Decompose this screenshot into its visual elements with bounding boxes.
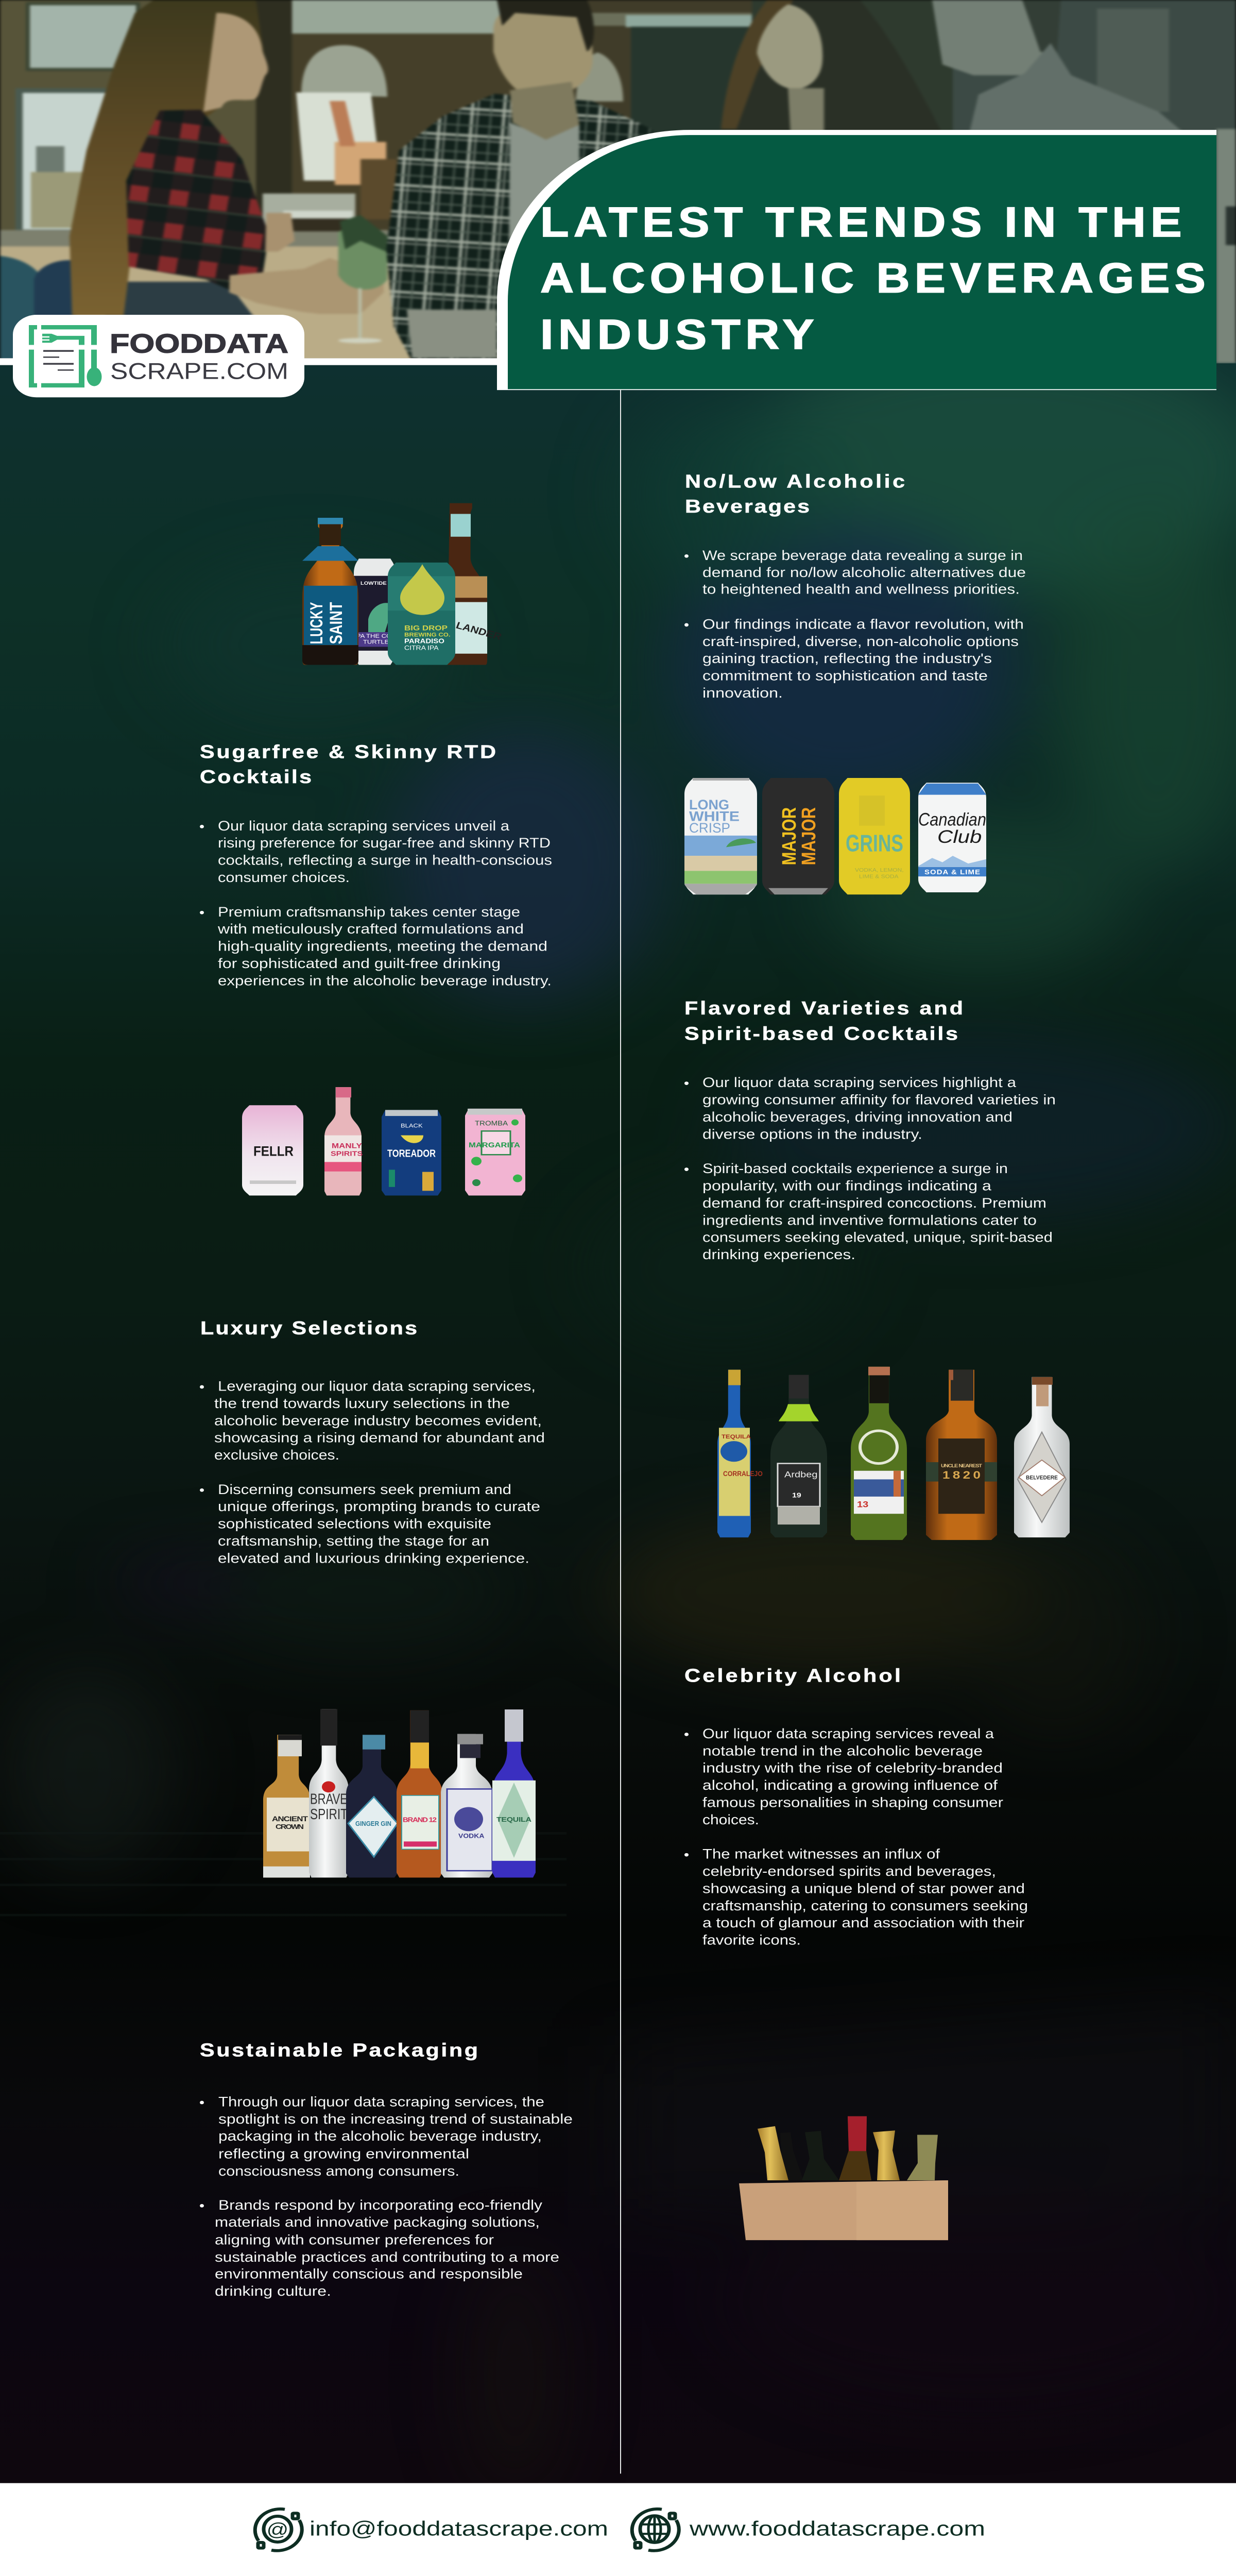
bullet list: a touch of glamour and association with their (702, 1916, 1024, 1931)
bullet list: craftsmanship, setting the stage for an (218, 1533, 489, 1549)
icon: email (255, 2509, 302, 2551)
bullet list: favorite icons. (702, 1933, 801, 1948)
bullet list: high-quality ingredients, meeting the demand (218, 939, 547, 954)
bottle: Belvedere: BELVEDERE (1026, 1474, 1058, 1481)
bullet list: notable trend in the alcoholic beverage (702, 1743, 983, 1759)
bottle: Ardbeg: Ardbeg (784, 1469, 817, 1479)
can: Major Major (762, 778, 834, 894)
can: Long White Crisp (684, 778, 757, 894)
can: Grins (839, 778, 910, 894)
man in grey shirt (932, 0, 1190, 138)
title: LATEST TRENDS IN THE (540, 199, 1187, 246)
bullet list: spotlight is on the increasing trend of sustainable (218, 2111, 573, 2127)
logo wordmark: SCRAPE.COM (110, 359, 288, 384)
heading (200, 742, 496, 787)
title panel (497, 130, 1216, 390)
panel: celebrity alcohol (684, 1666, 1028, 2240)
bottle: Brand 12: BRAND 12 (403, 1816, 437, 1823)
bottle: Vodka: VODKA (458, 1833, 484, 1839)
can: Grins: VODKA, LEMON, (855, 868, 904, 873)
can: Toreador: TOREADOR (387, 1147, 436, 1159)
can: Tromba margarita (465, 1109, 525, 1196)
can: Grins: LIME & SODA (859, 874, 899, 879)
panel: luxury selections (200, 1087, 545, 1566)
bullet list: choices. (702, 1812, 759, 1827)
bottle: Ardbeg (770, 1375, 827, 1537)
bottle: Brand 12 (397, 1710, 442, 1877)
icon: email: @ (267, 2520, 288, 2540)
logo wordmark: FOODDATA (110, 329, 288, 359)
bottle: Lucky Saint (302, 518, 358, 665)
bullet list: consciousness among consumers. (218, 2163, 459, 2179)
can: Canadian Club: SODA & LIME (924, 868, 980, 876)
chairs (0, 256, 76, 361)
bullet list: ingredients and inventive formulations cater to (702, 1213, 1037, 1228)
product image: bottles in paper bag (739, 2116, 948, 2240)
can: Canadian Club: Canadian (918, 810, 986, 830)
bottle: Ginger Gin: GINGER GIN (355, 1820, 391, 1827)
bottle: Manly Spirits: SPIRITS (331, 1150, 363, 1158)
product image: six spirit bottles (263, 1709, 536, 1877)
bullet list: environmentally conscious and responsible (215, 2266, 523, 2282)
heading: Luxury Selections (200, 1318, 417, 1338)
panel: sustainable packaging (200, 1709, 573, 2299)
bullet list: Leveraging our liquor data scraping services, (218, 1379, 536, 1394)
heading (685, 471, 905, 517)
heading: Flavored Varieties and (684, 998, 963, 1019)
email address: info@fooddatascrape.com (310, 2517, 608, 2540)
bullet list: gaining traction, reflecting the industry's (702, 651, 992, 666)
bullet list: sophisticated selections with exquisite (218, 1516, 491, 1532)
bullet list: consumers seeking elevated, unique, spirit-based (702, 1230, 1053, 1245)
bullet list: packaging in the alcoholic beverage industry, (218, 2129, 542, 2144)
logo (13, 315, 304, 397)
bullet list: cocktails, reflecting a surge in health-conscious (218, 853, 552, 868)
bottle: Original Tequila (492, 1709, 536, 1877)
can: Canadian Club (918, 783, 986, 892)
bullet list: experiences in the alcoholic beverage industry. (218, 973, 552, 989)
product image: four cans (684, 778, 986, 894)
bullet list: popularity, with our findings indicating a (702, 1178, 992, 1194)
bullet list: celebrity-endorsed spirits and beverages, (702, 1864, 996, 1879)
footer contact bar (0, 2483, 1236, 2576)
bottle: Vodka (441, 1734, 492, 1877)
bar counter (0, 218, 515, 363)
bottle: Uncle Nearest (926, 1370, 997, 1540)
title: INDUSTRY (540, 311, 819, 358)
bullet list: rising preference for sugar-free and skinny RTD (218, 836, 551, 851)
heading: Beverages (685, 496, 810, 517)
product image: five spirit bottles (717, 1367, 1070, 1540)
bottle: Brave Spirit (309, 1709, 349, 1877)
can: Big Drop: BREWING CO. (404, 631, 451, 638)
product image: low alcohol beers (302, 503, 503, 665)
white strip under photo (0, 358, 505, 365)
can: Long White Crisp: LONG (689, 797, 729, 812)
bottle: Ginger Gin (346, 1735, 398, 1877)
bottle: Original Tequila: TEQUILA (496, 1816, 531, 1824)
bottle: Manly Spirits: MANLY (332, 1142, 362, 1150)
can: Big Drop: BIG DROP (404, 624, 448, 632)
bullet list: drinking experiences. (702, 1247, 855, 1262)
bullet list: demand for craft-inspired concoctions. Premium (702, 1195, 1046, 1211)
heading: Celebrity Alcohol (684, 1666, 901, 1686)
bullet list: Spirit-based cocktails experience a surge in (702, 1161, 1008, 1176)
can: Major Major: MAJOR (798, 807, 820, 865)
can: Lowtide: LOWTIDE (360, 581, 387, 586)
bullet list: alcohol, indicating a growing influence of (702, 1778, 998, 1793)
can: Canadian Club: Club (937, 827, 982, 847)
bullet list: craftsmanship, catering to consumers seeking (702, 1898, 1028, 1913)
bottle: Corralejo tequila: TEQUILA (722, 1433, 751, 1440)
bottle: Uncle Nearest: UNCLE NEAREST (941, 1464, 983, 1469)
can: Long White Crisp: WHITE (689, 809, 740, 824)
bullet list: alcoholic beverages, driving innovation and (702, 1109, 1012, 1125)
hanging glasses and lamps (256, 0, 623, 232)
can: Lowtide (354, 558, 396, 665)
can: Lowtide: PA THE COS (356, 633, 396, 639)
wall and bar backdrop (0, 0, 1236, 363)
bullet list (684, 1075, 1056, 1262)
bottle: Brave Spirit: BRAVE (310, 1791, 348, 1807)
panel: sugarfree and skinny RTD cocktails (200, 503, 552, 989)
heading: Sugarfree & Skinny RTD (200, 742, 496, 762)
bullet list: exclusive choices. (214, 1447, 339, 1463)
wall pictures (15, 2, 140, 230)
bottle: SMWS: 13 (857, 1499, 868, 1509)
bottle: SMWS (851, 1367, 907, 1540)
bottle: Ancient Crown: CROWN (276, 1823, 304, 1831)
bottle: Manly Spirits (324, 1087, 363, 1196)
bottle: Uncle Nearest: 1820 (942, 1469, 981, 1481)
woman with long hair (70, 0, 384, 361)
bullet list (684, 548, 1026, 701)
bullet list: aligning with consumer preferences for (215, 2232, 494, 2248)
bullet list: showcasing a unique blend of star power and (702, 1881, 1025, 1896)
bullet list: famous personalities in shaping consumer (702, 1795, 1003, 1810)
heading: Sustainable Packaging (200, 2040, 478, 2061)
bottle: Brave Spirit: SPIRIT (310, 1806, 348, 1822)
bullet list (200, 1379, 545, 1566)
heading: Spirit-based Cocktails (684, 1024, 958, 1044)
heading: No/Low Alcoholic (685, 471, 905, 492)
can: Lowtide: TURTLE (363, 639, 389, 645)
can: Big Drop: CITRA IPA (404, 644, 439, 651)
man in plaid shirt (386, 0, 657, 361)
bullet list: Our liquor data scraping services unveil a (218, 818, 510, 834)
bullet list (684, 1726, 1028, 1948)
bullet list: drinking culture. (215, 2283, 331, 2299)
bullet list: the trend towards luxury selections in the (214, 1396, 510, 1411)
website address: www.fooddatascrape.com (689, 2517, 985, 2540)
woman with curly hair (721, 0, 942, 133)
bullet list: alcoholic beverage industry becomes evident, (214, 1413, 542, 1429)
bullet list: showcasing a rising demand for abundant and (214, 1430, 545, 1446)
bullet list: Discerning consumers seek premium and (218, 1482, 511, 1497)
can: Toreador: BLACK (401, 1123, 423, 1129)
bullet list: materials and innovative packaging solutions, (215, 2215, 540, 2230)
panel: flavored varieties and spirit-based cocktails (684, 998, 1070, 1540)
bullet list (200, 818, 552, 989)
cocktail glass (338, 215, 399, 343)
bullet list: The market witnesses an influx of (702, 1846, 940, 1862)
product image: pink cans and tonic bottle (242, 1087, 525, 1196)
can: Tromba margarita: MARGARITA (469, 1141, 520, 1149)
bullet list (200, 2094, 573, 2299)
bullet list: demand for no/low alcoholic alternatives due (702, 565, 1026, 581)
can: Toreador (382, 1110, 441, 1196)
title (540, 199, 1210, 358)
can: Major Major: MAJOR (778, 807, 800, 865)
bullet list: reflecting a growing environmental (218, 2146, 469, 2162)
heading: Cocktails (200, 767, 312, 787)
bullet list: unique offerings, prompting brands to curate (218, 1499, 540, 1515)
bullet list: sustainable practices and contributing to a more (215, 2249, 559, 2265)
can: Tromba margarita: TROMBA (475, 1120, 508, 1127)
logo icon (29, 325, 102, 387)
can: Grins: GRINS (846, 829, 903, 857)
bottle: Islander (445, 503, 503, 665)
bottle: Islander: LANDER (454, 620, 503, 642)
bullet list: diverse options in the industry. (702, 1127, 922, 1142)
logo wordmark (110, 329, 288, 384)
bottle: Corralejo tequila: CORRALEJO (723, 1469, 763, 1478)
bullet list: Our findings indicate a flavor revolution, with (702, 617, 1024, 632)
can: Big Drop (388, 563, 455, 665)
bullet list: growing consumer affinity for flavored varieties in (702, 1092, 1056, 1108)
bullet list: consumer choices. (218, 870, 350, 885)
bottle: Lucky Saint: SAINT (327, 602, 346, 644)
panel: no/low alcoholic beverages (684, 471, 1026, 894)
bullet list: industry with the rise of celebrity-branded (702, 1760, 1003, 1776)
can: Long White Crisp: CRISP (689, 820, 730, 836)
bullet list: Through our liquor data scraping services, the (218, 2094, 544, 2110)
bullet list: We scrape beverage data revealing a surge in (702, 548, 1023, 563)
bullet list: elevated and luxurious drinking experience. (218, 1551, 529, 1566)
heading (684, 998, 963, 1044)
icon: globe (632, 2509, 679, 2551)
bullet list: commitment to sophistication and taste (702, 668, 988, 684)
bottle: Belvedere (1014, 1377, 1070, 1537)
bottle: Corralejo tequila (717, 1370, 763, 1537)
bullet list: to heightened health and wellness priorities. (702, 582, 1020, 597)
bottle: Ancient Crown (263, 1735, 310, 1877)
centre divider line (620, 390, 621, 2473)
bottle: Ardbeg: 19 (792, 1492, 801, 1499)
can: Big Drop: PARADISO (404, 637, 444, 645)
bullet list: for sophisticated and guilt-free drinking (218, 956, 501, 971)
bottle: Ancient Crown: ANCIENT (272, 1815, 308, 1823)
bottle: Lucky Saint: LUCKY (307, 602, 327, 644)
bullet list: innovation. (702, 685, 783, 701)
bullet list: Our liquor data scraping services reveal a (702, 1726, 994, 1741)
bullet list: Premium craftsmanship takes center stage (218, 904, 520, 920)
header photo: friends at a bar (0, 0, 1236, 363)
bullet list: Brands respond by incorporating eco-friendly (218, 2197, 542, 2213)
can: Fellr: FELLR (253, 1144, 294, 1159)
can: Fellr (242, 1105, 303, 1196)
bullet list: craft-inspired, diverse, non-alcoholic options (702, 634, 1019, 649)
bullet list: with meticulously crafted formulations and (217, 922, 524, 937)
bullet list: Our liquor data scraping services highlight a (702, 1075, 1017, 1091)
